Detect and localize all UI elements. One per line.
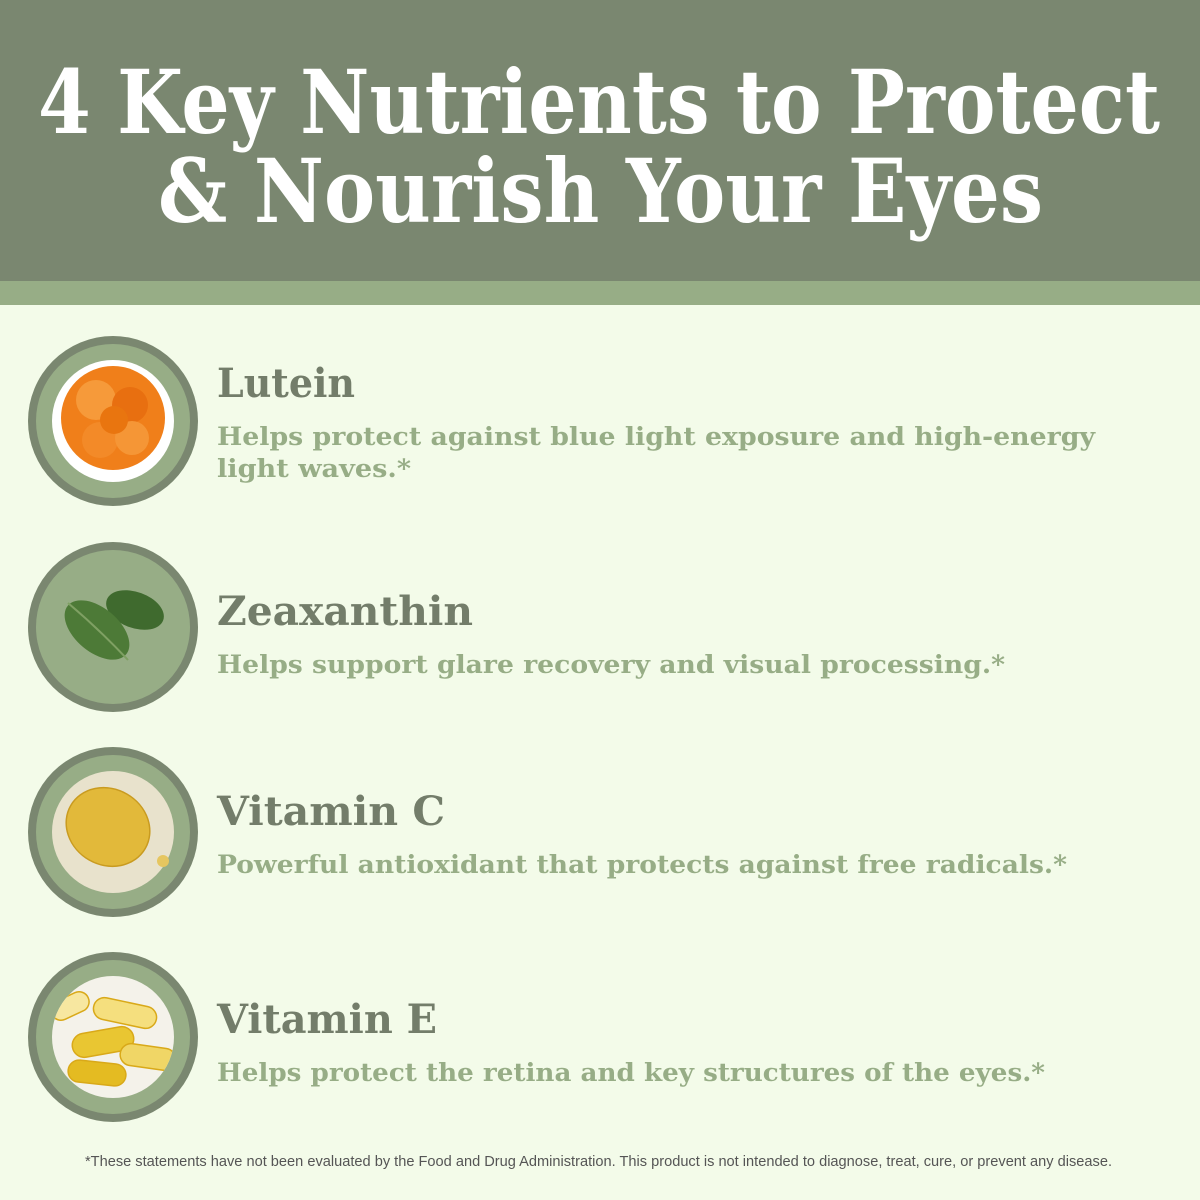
icon: spinach leaves [28, 542, 198, 712]
description: Lutein: Helps protect against blue light exposure and high-energy [217, 422, 1097, 451]
icon: softgels [28, 952, 198, 1122]
heading: Zeaxanthin: Zeaxanthin [217, 588, 473, 635]
description: Vitamin C: Powerful antioxidant that protects against free radicals.* [217, 850, 1067, 879]
heading: Vitamin C: Vitamin C [216, 788, 445, 835]
row: Vitamin E [28, 952, 1045, 1122]
heading: Lutein: Lutein [217, 360, 355, 407]
description: Lutein: light waves.* [217, 454, 411, 483]
title: & Nourish Your Eyes [158, 139, 1043, 243]
icon: marigold flower [28, 336, 198, 506]
icon: oil drop [28, 747, 198, 917]
description: Lutein [217, 422, 1097, 483]
description: Zeaxanthin: Helps support glare recovery and visual processing.* [217, 650, 1005, 679]
row: Lutein [28, 336, 1097, 506]
row: Zeaxanthin [28, 542, 1005, 712]
title [38, 50, 1160, 243]
footnote: *These statements have not been evaluated by the Food and Drug Administration. This product is not intended to diagnose, treat, cure, or prevent any disease. [85, 1153, 1112, 1170]
row: Vitamin C [28, 747, 1067, 917]
description: Vitamin E: Helps protect the retina and key structures of the eyes.* [217, 1058, 1045, 1087]
header band [0, 0, 1200, 305]
heading: Vitamin E: Vitamin E [216, 996, 437, 1043]
